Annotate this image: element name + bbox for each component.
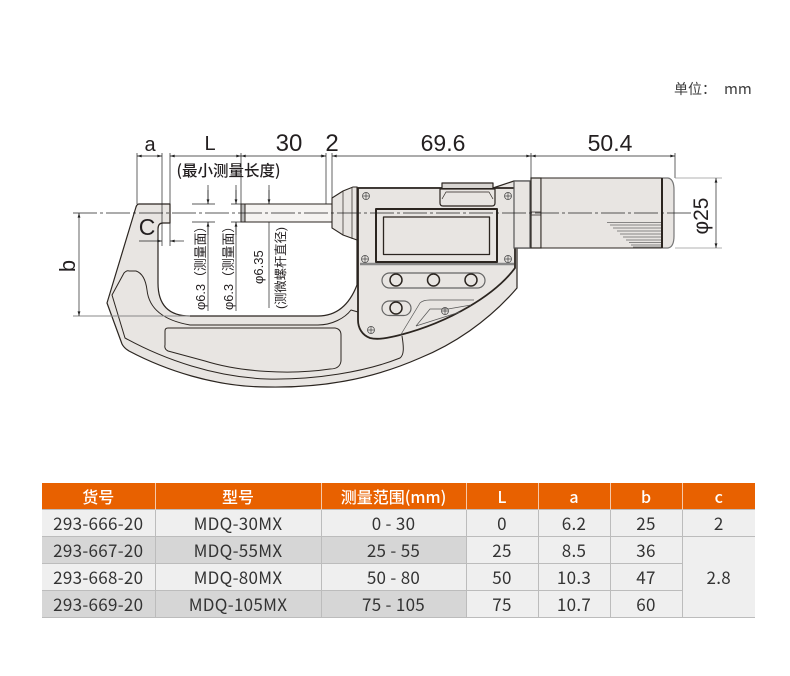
dimension labels: 50.4 [588,130,633,156]
specification table: 25 [636,510,656,535]
specification table: 2.8 [706,564,731,589]
dimension labels: a [144,134,156,156]
dimension labels: b [55,260,80,272]
specification table: 75 [492,591,512,616]
dimension labels: (测微螺杆直径) [274,227,288,309]
specification table: 60 [636,591,656,616]
unit label: mm [724,78,752,99]
dimension labels: φ6.3（测量面） [193,220,208,310]
electronics panel [358,188,515,339]
thimble assembly [514,178,674,248]
specification table: 50 [492,564,512,589]
panel divider [360,263,514,265]
dimension arrows [79,156,716,316]
specification table: 2 [714,510,724,535]
specification table: 0 [497,510,507,535]
single button [382,301,411,316]
specification table: 75 - 105 [362,591,425,616]
specification table: 293-668-20 [53,564,143,589]
specification table: b [641,484,651,508]
unit label: 单位： [674,79,716,99]
specification table: a [569,484,579,508]
specification table: 25 [492,537,512,562]
specification table: 6.2 [562,510,586,535]
dimension labels: φ6.35 [251,250,266,284]
panel decoration [400,300,474,336]
dimension and center lines [73,153,722,316]
specification table: 10.3 [557,564,591,589]
specification table: MDQ-105MX [189,591,287,616]
dimension labels: L [204,133,216,155]
specification table: 货号 [82,484,114,508]
dimension labels: 69.6 [421,130,465,156]
specification table [42,483,755,618]
specification table: 0 - 30 [372,510,415,535]
dimension labels: 30 [276,130,302,157]
dimension labels: φ25 [690,198,713,234]
specification table: 50 - 80 [367,564,420,589]
screws [362,192,512,334]
lcd display [376,209,497,262]
dimension labels: 2 [325,130,339,157]
specification table: 293-666-20 [53,510,143,535]
dimension labels: φ6.3（测量面） [221,220,236,310]
dimension labels: C [139,214,155,240]
thimble graduation wedge [607,222,661,247]
specification table: 型号 [222,484,254,508]
specification table: MDQ-80MX [194,564,282,589]
specification table: MDQ-30MX [194,510,282,535]
specification table: 47 [636,564,656,589]
specification table: MDQ-55MX [194,537,282,562]
button row [382,273,485,288]
specification table: 8.5 [562,537,586,562]
dimension labels [55,130,713,310]
unit label [674,78,752,99]
specification table: c [715,484,723,508]
specification table: 293-669-20 [53,591,143,616]
specification table: 36 [636,537,656,562]
micrometer frame [107,181,530,387]
specification table: 10.7 [557,591,591,616]
dimension labels: (最小测量长度) [176,159,281,181]
specification table: 293-667-20 [53,537,143,562]
specification table: 测量范围(mm) [341,484,446,508]
specification table: 25 - 55 [367,537,420,562]
spindle and cone collar [241,187,357,240]
top button [442,183,493,188]
frame inner contour [112,271,403,379]
specification table: L [498,484,506,508]
